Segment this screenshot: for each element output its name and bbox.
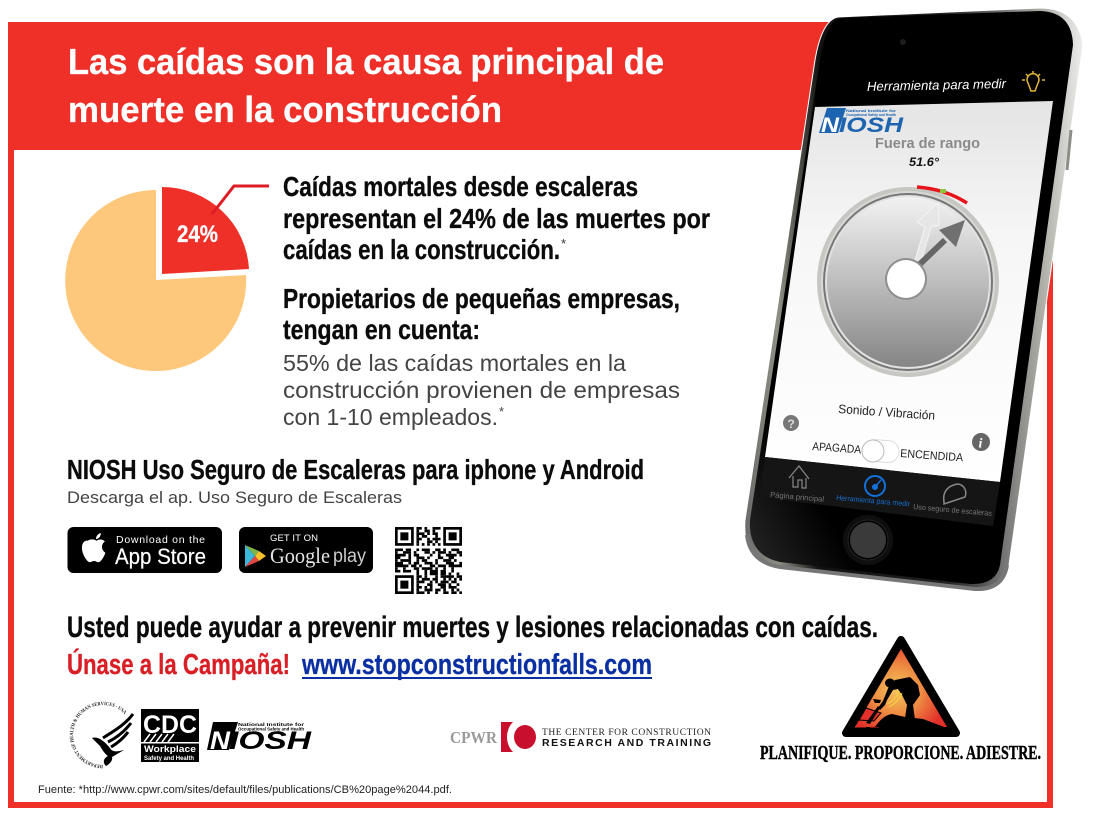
logo: NIOSH black: IOSH xyxy=(229,727,312,755)
phone glass xyxy=(750,11,1073,584)
status text: Fuera de rango xyxy=(875,135,980,152)
logo: CDC Workplace Safety and Health: CDC xyxy=(143,711,197,739)
screen xyxy=(765,101,1053,482)
text block: ladder deaths statistic: representan el 24% de las muertes por xyxy=(283,203,710,234)
tab: measuring tool xyxy=(836,476,911,508)
logo: NIOSH blue xyxy=(819,108,904,137)
text block: small business owners: * xyxy=(499,404,504,419)
call to action xyxy=(67,611,878,681)
status text xyxy=(875,135,980,169)
badge: App Store: App Store xyxy=(115,544,206,569)
tab: home: Página principal xyxy=(770,490,825,504)
title xyxy=(68,41,664,130)
logo: CPWR: RESEARCH AND TRAINING xyxy=(542,737,711,749)
pie chart: 24%: 24% xyxy=(177,221,218,248)
logo: CDC Workplace Safety and Health: Workplace xyxy=(144,744,196,755)
logo: NIOSH blue: IOSH xyxy=(839,114,904,137)
badge: App Store: Download on the xyxy=(116,534,205,546)
logo: NIOSH black: National Institute for xyxy=(238,722,304,727)
app heading xyxy=(67,454,644,507)
bottom metal edge xyxy=(747,535,1007,589)
icon: info: i xyxy=(978,436,982,452)
status text: 51.6° xyxy=(909,155,939,169)
logo: NIOSH blue: Occupational Safety and Health xyxy=(846,113,896,117)
badge: Google Play xyxy=(239,527,373,573)
logo: CPWR xyxy=(450,722,711,752)
logo: NIOSH blue: National Institute for xyxy=(846,109,897,113)
text block: small business owners: 55% de las caídas mortales en la xyxy=(283,350,626,376)
text block: ladder deaths statistic: caídas en la construcción. xyxy=(283,234,560,265)
source footnote: Fuente: *http://www.cpwr.com/sites/default/files/publications/CB%20page%2044.pdf. xyxy=(38,784,452,796)
sound and vibration control xyxy=(812,402,964,464)
logo: NIOSH black: N xyxy=(210,727,231,755)
text block: small business owners: Propietarios de pequeñas empresas, xyxy=(283,283,680,314)
icon: info xyxy=(972,433,990,452)
title: muerte en la construcción xyxy=(68,89,502,130)
logo: CPWR: CPWR xyxy=(450,728,498,747)
sound and vibration control: Sonido / Vibración xyxy=(838,402,936,423)
logo: HHS seal: DEPARTMENT OF HEALTH & HUMAN SERVICES · USA xyxy=(70,702,126,768)
red ladder pieces xyxy=(859,708,881,721)
app heading: Descarga el ap. Uso Seguro de Escaleras xyxy=(67,488,402,507)
badge: Google Play: Google xyxy=(270,543,330,568)
app header label: Herramienta para medir xyxy=(867,76,1007,94)
icon: light bulb xyxy=(1022,71,1045,91)
angle dial xyxy=(817,187,999,377)
tab: measuring tool: Herramienta para medir xyxy=(836,493,911,508)
sound and vibration control: ENCENDIDA xyxy=(900,448,964,464)
tab: home xyxy=(770,466,825,504)
worker silhouette xyxy=(866,677,947,728)
pie chart: 24% xyxy=(65,186,269,371)
badge: App Store xyxy=(68,527,222,573)
campaign triangle logo xyxy=(846,640,956,733)
logo: NIOSH blue: N xyxy=(821,114,840,137)
badge: Google Play: GET IT ON xyxy=(270,533,318,544)
text block: small business owners xyxy=(283,283,680,430)
text block: ladder deaths statistic xyxy=(283,171,710,265)
app heading: NIOSH Uso Seguro de Escaleras para iphone y Android xyxy=(67,454,644,485)
call to action: www.stopconstructionfalls.com xyxy=(301,649,652,681)
text block: small business owners: construcción provienen de empresas xyxy=(283,377,680,403)
home button xyxy=(843,515,893,565)
badge: Google Play: play xyxy=(333,546,366,567)
tab: ladder safety xyxy=(913,484,993,518)
phone metal body xyxy=(745,8,1083,590)
text block: small business owners: con 1-10 empleados. xyxy=(283,404,498,430)
text block: ladder deaths statistic: Caídas mortales desde escaleras xyxy=(283,171,638,202)
text block: small business owners: tengan en cuenta: xyxy=(283,314,480,345)
icon: help xyxy=(783,415,799,431)
header band xyxy=(8,22,868,150)
volume button xyxy=(1067,130,1071,170)
text block: ladder deaths statistic: * xyxy=(561,236,566,251)
sound and vibration control: APAGADA xyxy=(812,441,862,456)
QR code xyxy=(395,528,462,593)
yellow rope xyxy=(887,692,902,707)
logo: CDC Workplace Safety and Health: Safety and Health xyxy=(144,755,194,762)
logo: NIOSH black xyxy=(207,722,312,755)
tab bar xyxy=(759,457,1000,526)
logo: CPWR: THE CENTER FOR CONSTRUCTION xyxy=(542,728,711,738)
smartphone xyxy=(745,8,1083,590)
tab: ladder safety: Uso seguro de escaleras xyxy=(913,502,993,518)
title: Las caídas son la causa principal de xyxy=(68,41,664,82)
call to action: Únase a la Campaña! xyxy=(67,647,290,681)
logo: NIOSH black: Occupational Safety and Health xyxy=(238,726,304,732)
earpiece camera xyxy=(900,39,906,45)
icon: help: ? xyxy=(788,417,795,431)
logo: CDC Workplace Safety and Health xyxy=(141,709,199,762)
